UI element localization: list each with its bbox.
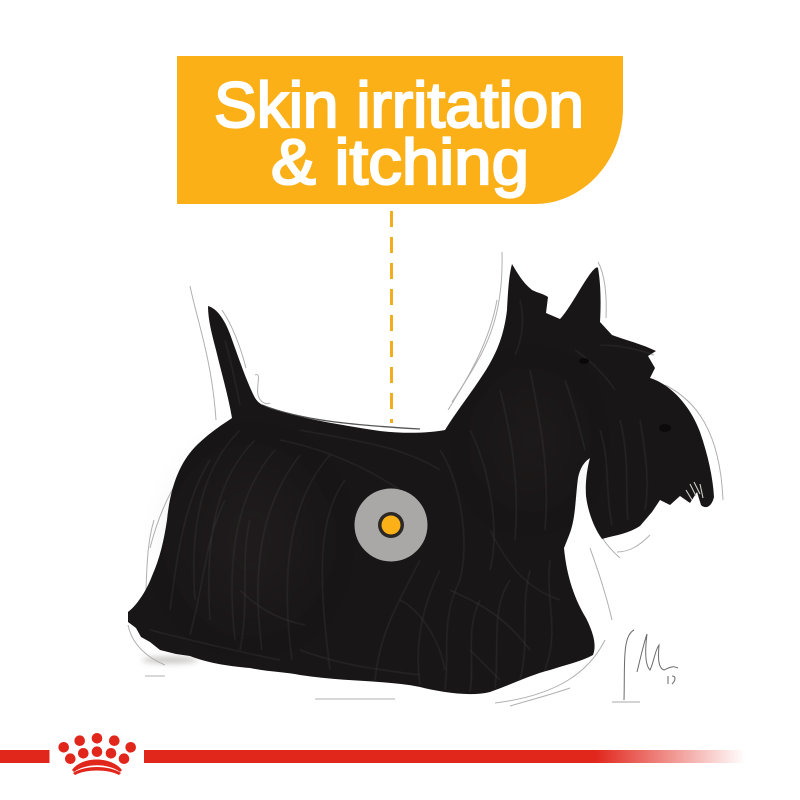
footer brand bar: [0, 733, 745, 775]
heading text: & itching: [271, 126, 529, 198]
body tonal shading: [195, 390, 560, 610]
dashed connector line: [390, 211, 393, 423]
dog silhouette: [128, 264, 714, 694]
skin spot marker: [354, 488, 428, 562]
sketch lines around dog: [128, 252, 723, 706]
heading text: Skin irritation: [214, 69, 584, 141]
heading text: [214, 69, 584, 198]
illustration: Scottish terrier: [128, 252, 723, 706]
dog facial features: [579, 358, 703, 500]
fur strands: [150, 300, 654, 692]
heading banner: [177, 56, 623, 204]
artist signature: [612, 630, 678, 702]
ground shadow: [142, 656, 198, 664]
icon: crown logo: [58, 733, 136, 775]
